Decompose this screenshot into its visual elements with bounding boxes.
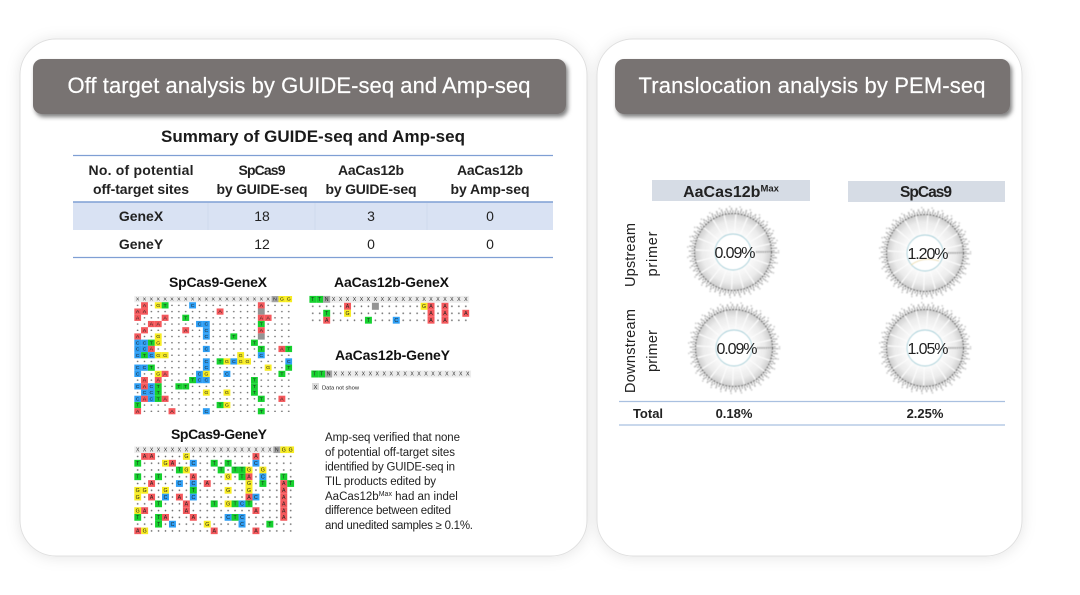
alignment grid: SpCas9-GeneX: C xyxy=(198,322,202,328)
alignment grid: SpCas9-GeneX: G xyxy=(225,390,229,396)
alignment grid: SpCas9-GeneX: C xyxy=(259,353,264,359)
alignment grid: SpCas9-GeneY: G xyxy=(143,488,147,494)
alignment grid: SpCas9-GeneX: T xyxy=(280,372,283,377)
alignment grid: SpCas9-GeneX: C xyxy=(136,347,140,352)
alignment grid: AaCas12b-GeneX: XXXXXXXXXXXXXXXXXXXX xyxy=(332,297,468,303)
alignment grid: SpCas9-GeneY: C xyxy=(164,495,168,501)
alignment grid: SpCas9-GeneX: G xyxy=(204,372,209,377)
alignment grid: SpCas9-GeneY: T xyxy=(136,515,140,521)
table row: GeneX: 0 xyxy=(486,208,494,224)
table row: GeneX: GeneX xyxy=(119,208,164,224)
alignment grid: SpCas9-GeneX: G xyxy=(204,390,209,396)
alignment grid: SpCas9-GeneX: C xyxy=(143,365,147,371)
row label: upstream primer: Upstream xyxy=(623,223,639,287)
alignment grid: SpCas9-GeneX: A xyxy=(143,309,147,315)
alignment grid: SpCas9-GeneX: C xyxy=(204,378,209,384)
alignment grid: SpCas9-GeneX: C xyxy=(136,372,140,377)
alignment grid: SpCas9-GeneX: C xyxy=(204,365,209,371)
table header row: off-target sites xyxy=(93,181,189,197)
alignment grid: SpCas9-GeneY: A xyxy=(150,454,154,460)
table header row: by GUIDE-seq xyxy=(216,181,308,197)
alignment grid: SpCas9-GeneY: C xyxy=(191,481,196,487)
alignment grid: SpCas9-GeneY: G xyxy=(163,461,168,467)
alignment grid: AaCas12b-GeneX: A xyxy=(346,304,350,310)
alignment grid: SpCas9-GeneX: G xyxy=(156,340,160,346)
alignment grid: SpCas9-GeneX: T xyxy=(260,409,263,415)
alignment grid: SpCas9-GeneX: C xyxy=(204,347,209,352)
alignment grid: SpCas9-GeneY: G xyxy=(143,529,147,535)
alignment grid: SpCas9-GeneY: T xyxy=(220,468,224,474)
alignment grid: SpCas9-GeneY: T xyxy=(233,468,238,474)
table header row: SpCas9 xyxy=(238,162,286,178)
alignment grid: SpCas9-GeneY: A xyxy=(282,495,286,501)
alignment grid: SpCas9-GeneX: C xyxy=(225,372,229,377)
alignment grid: SpCas9-GeneY: A xyxy=(143,454,147,460)
alignment grid: SpCas9-GeneX: T xyxy=(218,403,222,409)
alignment grid: SpCas9-GeneX: T xyxy=(150,365,153,371)
alignment grid: SpCas9-GeneX: T xyxy=(184,316,187,321)
text block: Amp-seq conclusion: Max xyxy=(379,491,392,498)
alignment grid: SpCas9-GeneY: C xyxy=(191,461,196,467)
alignment grid: AaCas12b-GeneX: N xyxy=(325,297,329,303)
heading: SpCas9-GeneX: SpCas9-GeneX xyxy=(169,274,268,290)
alignment grid: SpCas9-GeneX: A xyxy=(157,322,161,328)
alignment grid: SpCas9-GeneX: T xyxy=(253,378,256,384)
alignment grid: AaCas12b-GeneX: A xyxy=(464,311,468,317)
alignment grid: AaCas12b-GeneX xyxy=(309,296,469,324)
alignment grid: SpCas9-GeneX: T xyxy=(287,365,290,371)
alignment grid: SpCas9-GeneX: C xyxy=(143,340,147,346)
alignment grid: SpCas9-GeneY: A xyxy=(178,495,182,501)
alignment grid: SpCas9-GeneY: C xyxy=(240,515,244,521)
alignment grid: SpCas9-GeneY: C xyxy=(240,502,244,508)
alignment grid: SpCas9-GeneY: G xyxy=(136,508,140,514)
alignment grid: SpCas9-GeneY: C xyxy=(178,481,182,487)
alignment grid: SpCas9-GeneX: G xyxy=(287,297,291,303)
alignment grid: SpCas9-GeneY: G xyxy=(205,522,209,528)
alignment grid: SpCas9-GeneX: C xyxy=(136,397,140,402)
alignment grid: SpCas9-GeneX: C xyxy=(198,378,202,384)
alignment grid: SpCas9-GeneY: C xyxy=(191,495,196,501)
alignment grid: SpCas9-GeneY: A xyxy=(192,475,196,480)
column header: AaCas12b Max xyxy=(652,180,810,201)
alignment grid: SpCas9-GeneY: T xyxy=(247,502,251,508)
alignment grid: SpCas9-GeneX: T xyxy=(218,359,222,365)
alignment grid: SpCas9-GeneX: A xyxy=(260,328,264,334)
alignment grid: SpCas9-GeneY: A xyxy=(150,495,154,501)
alignment grid: SpCas9-GeneX: T xyxy=(143,353,146,359)
alignment grid: SpCas9-GeneY: C xyxy=(261,475,265,480)
alignment grid: SpCas9-GeneX: T xyxy=(260,347,263,352)
alignment grid: SpCas9-GeneX: A xyxy=(136,316,140,321)
alignment grid: SpCas9-GeneY: A xyxy=(185,502,189,508)
alignment grid: SpCas9-GeneY: G xyxy=(184,454,188,460)
table: summary of GUIDE-seq and Amp-seq xyxy=(73,127,553,258)
heading: off target analysis xyxy=(33,59,566,114)
alignment grid: SpCas9-GeneY: G xyxy=(163,488,168,494)
alignment grid: SpCas9-GeneX: C xyxy=(136,384,140,390)
row label: downstream primer: Downstream xyxy=(623,309,639,393)
panel: translocation analysis xyxy=(597,39,1022,556)
alignment grid: SpCas9-GeneY: G xyxy=(261,468,265,474)
alignment grid: SpCas9-GeneY: T xyxy=(157,475,161,480)
alignment grid: AaCas12b-GeneX: T xyxy=(318,297,322,303)
heading: SpCas9-GeneY: SpCas9-GeneY xyxy=(171,426,268,442)
alignment grid: SpCas9-GeneX: T xyxy=(184,384,187,390)
alignment grid: SpCas9-GeneY: A xyxy=(282,481,286,487)
alignment grid: SpCas9-GeneX: G xyxy=(156,372,160,377)
alignment grid: SpCas9-GeneX: C xyxy=(150,353,154,359)
alignment grid: AaCas12b-GeneY: N xyxy=(327,372,331,378)
alignment grid: SpCas9-GeneY: T xyxy=(261,481,265,487)
alignment grid: SpCas9-GeneY: A xyxy=(206,481,210,487)
total row xyxy=(619,402,1005,425)
alignment grid: SpCas9-GeneY: A xyxy=(254,529,258,535)
table header row: AaCas12b xyxy=(338,162,404,178)
heading: off target analysis: Off target analysis by GUIDE-seq and Amp-seq xyxy=(68,73,530,98)
alignment grid: SpCas9-GeneY: A xyxy=(164,515,168,521)
alignment grid: SpCas9-GeneX: C xyxy=(136,365,140,371)
row label: upstream primer xyxy=(623,223,661,287)
table header row: AaCas12b xyxy=(457,162,523,178)
table header row: No. of potential xyxy=(88,162,194,178)
alignment grid: SpCas9-GeneX: XXXXXXXXXXXXXXXXXXXX xyxy=(136,297,271,303)
text block: Amp-seq conclusion: identified by GUIDE-seq in xyxy=(325,462,455,474)
alignment grid: SpCas9-GeneX: A xyxy=(184,328,188,334)
alignment grid: SpCas9-GeneY: G xyxy=(247,468,251,474)
alignment grid: SpCas9-GeneY: T xyxy=(157,502,161,508)
alignment grid: SpCas9-GeneX: C xyxy=(191,303,195,309)
alignment grid: SpCas9-GeneY: G xyxy=(184,468,188,474)
alignment grid: SpCas9-GeneY: T xyxy=(192,488,196,494)
circos plot: AaCas12b upstream 0.09%: 0.09% xyxy=(714,245,756,262)
text block: Amp-seq conclusion: difference between edited xyxy=(325,505,451,517)
alignment grid: AaCas12b-GeneX: A xyxy=(443,311,447,317)
alignment grid: SpCas9-GeneX: C xyxy=(136,353,140,359)
alignment grid: SpCas9-GeneX: A xyxy=(136,309,140,315)
alignment grid: SpCas9-GeneX: A xyxy=(266,316,271,321)
alignment grid: SpCas9-GeneX: G xyxy=(156,303,160,309)
circos plot: SpCas9 downstream 1.05% xyxy=(880,302,970,394)
alignment grid: SpCas9-GeneX: A xyxy=(143,384,147,390)
alignment grid: SpCas9-GeneY: T xyxy=(136,475,140,480)
alignment grid: SpCas9-GeneY: T xyxy=(227,461,231,467)
table row: GeneY: 0 xyxy=(486,236,494,252)
alignment grid: SpCas9-GeneX: C xyxy=(150,397,154,402)
alignment grid: SpCas9-GeneX: N xyxy=(273,297,277,303)
circos plot: AaCas12b downstream 0.09% xyxy=(688,302,780,394)
alignment grid: SpCas9-GeneX: A xyxy=(260,316,264,321)
alignment grid: SpCas9-GeneY: A xyxy=(192,515,196,521)
alignment grid: SpCas9-GeneX: C xyxy=(198,372,202,377)
alignment grid: SpCas9-GeneX: G xyxy=(225,359,229,365)
heading: AaCas12b-GeneY: AaCas12b-GeneY xyxy=(335,347,451,363)
row label: downstream primer: primer xyxy=(645,330,661,372)
alignment grid: SpCas9-GeneY: G xyxy=(289,447,293,453)
table row: GeneX xyxy=(119,208,494,224)
alignment grid: SpCas9-GeneX: A xyxy=(163,397,168,402)
alignment grid: AaCas12b-GeneX: A xyxy=(443,304,447,310)
heading: translocation analysis: Translocation analysis by PEM-seq xyxy=(638,73,986,98)
alignment grid: SpCas9-GeneX: A xyxy=(218,309,223,315)
alignment grid: SpCas9-GeneY: A xyxy=(254,508,258,514)
table row: GeneX: 3 xyxy=(367,208,375,224)
alignment grid: SpCas9-GeneX: A xyxy=(280,347,284,352)
alignment grid: SpCas9-GeneY: A xyxy=(150,481,154,487)
alignment grid: AaCas12b-GeneX: A xyxy=(429,318,433,324)
alignment grid: AaCas12b-GeneX: A xyxy=(443,318,447,324)
alignment grid: SpCas9-GeneY: A xyxy=(185,508,189,514)
text block: Amp-seq conclusion: of potential off-target sites xyxy=(325,447,455,459)
alignment grid: SpCas9-GeneY: T xyxy=(213,502,217,508)
alignment grid: SpCas9-GeneX: T xyxy=(232,334,235,340)
alignment grid: SpCas9-GeneY: A xyxy=(282,502,286,508)
alignment grid: SpCas9-GeneX: C xyxy=(143,390,147,396)
alignment grid: SpCas9-GeneX: A xyxy=(150,347,154,352)
text block: Amp-seq conclusion xyxy=(325,432,473,532)
text block: Amp-seq conclusion: TIL products edited by xyxy=(325,476,436,488)
circos plot: AaCas12b downstream 0.09%: 0.09% xyxy=(716,341,758,358)
alignment grid: SpCas9-GeneY: T xyxy=(240,468,244,474)
alignment grid: SpCas9-GeneX: G xyxy=(246,359,250,365)
alignment grid: SpCas9-GeneY: A xyxy=(282,508,286,514)
alignment grid: SpCas9-GeneY: A xyxy=(247,475,251,480)
alignment grid: SpCas9-GeneX: T xyxy=(150,340,153,346)
panel: off target analysis xyxy=(20,39,587,556)
alignment grid: SpCas9-GeneX: T xyxy=(177,384,180,390)
alignment grid: AaCas12b-GeneY: T xyxy=(313,372,317,378)
alignment grid: SpCas9-GeneY: T xyxy=(157,522,161,528)
alignment grid: SpCas9-GeneX: C xyxy=(204,409,209,415)
alignment grid: AaCas12b-GeneX: C xyxy=(394,318,398,324)
alignment grid: SpCas9-GeneY: C xyxy=(171,522,175,528)
alignment grid: SpCas9-GeneY: C xyxy=(254,495,258,501)
circos plot: SpCas9 upstream 1.20%: 1.20% xyxy=(908,246,948,263)
alignment grid: SpCas9-GeneX: C xyxy=(143,347,147,352)
alignment grid: SpCas9-GeneX: T xyxy=(287,347,290,352)
alignment grid: SpCas9-GeneX: C xyxy=(150,390,154,396)
alignment grid: SpCas9-GeneX: T xyxy=(260,322,263,328)
alignment grid: SpCas9-GeneX: T xyxy=(253,384,256,390)
alignment grid: SpCas9-GeneX: T xyxy=(164,303,167,309)
alignment grid: SpCas9-GeneY: G xyxy=(226,475,230,480)
alignment grid: SpCas9-GeneX: A xyxy=(260,303,264,309)
column header: AaCas12b Max: AaCas12b xyxy=(683,184,760,201)
alignment grid: SpCas9-GeneY: G xyxy=(136,488,140,494)
alignment grid: SpCas9-GeneY xyxy=(134,446,294,535)
alignment grid: SpCas9-GeneY: G xyxy=(136,495,140,501)
total row: 2.25% xyxy=(907,406,944,421)
alignment grid: AaCas12b-GeneX: G xyxy=(422,304,426,310)
alignment grid: AaCas12b-GeneX: G xyxy=(346,311,350,317)
alignment grid: SpCas9-GeneY: A xyxy=(282,515,286,521)
alignment grid: SpCas9-GeneY: T xyxy=(157,515,161,521)
legend: data not show: Data not show xyxy=(322,386,360,392)
table header row xyxy=(88,162,530,197)
text block: Amp-seq conclusion: Amp-seq verified that none xyxy=(325,432,460,444)
alignment grid: SpCas9-GeneX: A xyxy=(163,316,168,321)
alignment grid: SpCas9-GeneX: T xyxy=(191,378,194,384)
alignment grid: SpCas9-GeneY: G xyxy=(282,447,286,453)
circos plot: SpCas9 upstream 1.20% xyxy=(880,208,970,298)
alignment grid: SpCas9-GeneY: A xyxy=(143,508,147,514)
alignment grid: SpCas9-GeneY: G xyxy=(226,488,230,494)
alignment grid: SpCas9-GeneX: A xyxy=(157,378,161,384)
alignment grid: SpCas9-GeneX: T xyxy=(253,340,256,346)
alignment grid: SpCas9-GeneX: T xyxy=(157,390,160,396)
alignment grid: SpCas9-GeneY: N xyxy=(275,447,279,453)
column header: AaCas12b Max: Max xyxy=(760,184,780,194)
alignment grid: AaCas12b-GeneX: T xyxy=(325,311,329,317)
alignment grid: SpCas9-GeneX: C xyxy=(150,384,154,390)
alignment grid: SpCas9-GeneX: T xyxy=(157,397,160,402)
alignment grid: SpCas9-GeneX: A xyxy=(163,372,168,377)
alignment grid: SpCas9-GeneX: A xyxy=(143,328,147,334)
legend: data not show xyxy=(312,383,360,392)
alignment grid: SpCas9-GeneX: G xyxy=(156,353,160,359)
text block: Amp-seq conclusion: and unedited samples ≥ 0.1%. xyxy=(325,520,473,532)
alignment grid: SpCas9-GeneY: T xyxy=(178,468,182,474)
alignment grid: SpCas9-GeneY: A xyxy=(212,529,217,535)
alignment grid: SpCas9-GeneY: T xyxy=(289,481,293,487)
alignment grid: SpCas9-GeneX: C xyxy=(204,334,209,340)
alignment grid: SpCas9-GeneY: T xyxy=(233,502,238,508)
text block: Amp-seq conclusion: AaCas12b xyxy=(325,491,379,503)
alignment grid: AaCas12b-GeneY: XXXXXXXXXXXXXXXXXXXX xyxy=(334,372,470,378)
table row: GeneY: 0 xyxy=(367,236,375,252)
alignment grid: SpCas9-GeneX: C xyxy=(136,340,140,346)
circos plot: SpCas9 downstream 1.05%: 1.05% xyxy=(908,341,948,358)
column header: SpCas9 xyxy=(848,181,1005,202)
alignment grid: SpCas9-GeneX: T xyxy=(136,403,139,409)
table row: GeneX: 18 xyxy=(254,208,270,224)
alignment grid: SpCas9-GeneX: C xyxy=(287,359,291,365)
alignment grid: SpCas9-GeneX: G xyxy=(239,359,243,365)
alignment grid: AaCas12b-GeneX: A xyxy=(429,304,433,310)
alignment grid: SpCas9-GeneX: A xyxy=(143,378,147,384)
table row: GeneY: GeneY xyxy=(119,236,164,252)
alignment grid: SpCas9-GeneX: A xyxy=(136,409,140,415)
alignment grid: AaCas12b-GeneX: T xyxy=(311,297,315,303)
alignment grid: SpCas9-GeneX: G xyxy=(225,403,229,409)
table header row: by Amp-seq xyxy=(450,181,530,197)
table title: Summary of GUIDE-seq and Amp-seq xyxy=(161,127,465,146)
alignment grid: SpCas9-GeneX: A xyxy=(143,303,147,309)
alignment grid: SpCas9-GeneX: A xyxy=(143,397,147,402)
alignment grid: SpCas9-GeneX: G xyxy=(163,353,167,359)
alignment grid: SpCas9-GeneX: A xyxy=(136,334,140,340)
alignment grid: SpCas9-GeneY: G xyxy=(226,502,230,508)
alignment grid: SpCas9-GeneY: T xyxy=(136,461,140,467)
alignment grid: SpCas9-GeneY: A xyxy=(136,529,140,535)
alignment grid: AaCas12b-GeneX: T xyxy=(367,318,371,324)
alignment grid: SpCas9-GeneY: T xyxy=(240,475,244,480)
alignment grid: SpCas9-GeneY: C xyxy=(254,461,258,467)
alignment grid: SpCas9-GeneX: T xyxy=(260,397,263,402)
text block: Amp-seq conclusion: had an indel xyxy=(392,491,458,503)
heading: translocation analysis xyxy=(615,59,1010,114)
alignment grid: SpCas9-GeneX: C xyxy=(204,359,209,365)
alignment grid: SpCas9-GeneX: A xyxy=(280,397,284,402)
total row: 0.18% xyxy=(716,406,753,421)
total row: Total xyxy=(633,406,663,421)
alignment grid: SpCas9-GeneY: A xyxy=(247,495,251,501)
table row: GeneY xyxy=(119,236,494,252)
alignment grid: SpCas9-GeneX xyxy=(134,296,292,415)
row label: upstream primer: primer xyxy=(645,231,661,276)
alignment grid: SpCas9-GeneX: C xyxy=(204,328,209,334)
alignment grid: SpCas9-GeneX: C xyxy=(232,359,236,365)
alignment grid: SpCas9-GeneY: A xyxy=(282,488,286,494)
alignment grid: SpCas9-GeneX: G xyxy=(239,353,243,359)
alignment grid: SpCas9-GeneX: C xyxy=(204,322,209,328)
alignment grid: SpCas9-GeneY: A xyxy=(254,454,258,460)
alignment grid: SpCas9-GeneY: G xyxy=(247,481,251,487)
alignment grid: SpCas9-GeneY: C xyxy=(226,515,230,521)
table header row: by GUIDE-seq xyxy=(326,181,416,197)
alignment grid: SpCas9-GeneY: T xyxy=(282,475,286,480)
alignment grid: SpCas9-GeneY: G xyxy=(247,488,251,494)
alignment grid: SpCas9-GeneY: T xyxy=(213,461,217,467)
alignment grid: SpCas9-GeneX: A xyxy=(170,409,174,415)
alignment grid: SpCas9-GeneX: A xyxy=(150,322,154,328)
alignment grid: SpCas9-GeneY: A xyxy=(171,461,175,467)
table row: GeneY: 12 xyxy=(254,236,270,252)
alignment grid: SpCas9-GeneX: G xyxy=(266,365,270,371)
alignment grid: AaCas12b-GeneX: A xyxy=(325,318,329,324)
circos plot: AaCas12b upstream 0.09% xyxy=(688,206,778,298)
alignment grid: SpCas9-GeneY: T xyxy=(268,522,272,528)
heading: AaCas12b-GeneX: AaCas12b-GeneX xyxy=(334,274,450,290)
alignment grid: AaCas12b-GeneY: T xyxy=(320,372,324,378)
alignment grid: SpCas9-GeneX: G xyxy=(156,334,160,340)
alignment grid: SpCas9-GeneY: XXXXXXXXXXXXXXXXXXXX xyxy=(136,447,272,453)
alignment grid: SpCas9-GeneY: C xyxy=(240,522,244,528)
alignment grid: SpCas9-GeneX: G xyxy=(280,297,284,303)
row label: downstream primer xyxy=(623,309,661,393)
legend: data not show: X xyxy=(314,385,318,391)
alignment grid: SpCas9-GeneY: T xyxy=(233,515,238,521)
column header: SpCas9: SpCas9 xyxy=(900,184,952,201)
alignment grid: AaCas12b-GeneX: A xyxy=(429,311,433,317)
alignment grid: SpCas9-GeneX: T xyxy=(253,390,256,396)
alignment grid: SpCas9-GeneX: T xyxy=(157,384,160,390)
